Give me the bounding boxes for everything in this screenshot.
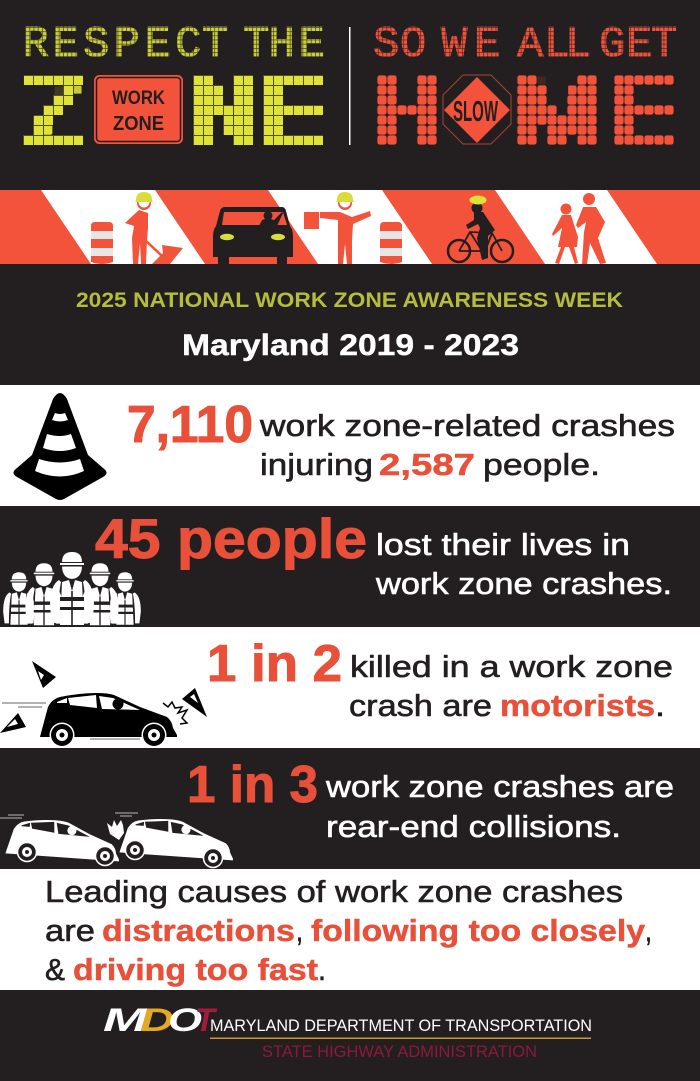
logo: mdot: D [140, 1002, 174, 1038]
heading word: home in dots: E [611, 56, 676, 166]
divider [349, 27, 350, 145]
icon: traffic cone [14, 393, 106, 500]
text: crash are motorists: motorists [500, 688, 655, 723]
icon: traffic barrel left [91, 222, 113, 264]
sign: work zone: ZONE [113, 113, 164, 135]
heading word: zone in dot matrix: Z [26, 56, 82, 166]
icon: flagger [304, 192, 371, 264]
text: crash are motorists: . [655, 688, 665, 723]
text: crashes line two: injuring [260, 447, 373, 482]
panel: leading causes [0, 869, 700, 990]
text: crash are motorists: crash are [349, 688, 492, 723]
text: crash are motorists [349, 688, 665, 723]
sign: slow [443, 75, 511, 144]
text: leading causes line two: distractions [102, 913, 295, 948]
text: crashes line two [260, 447, 600, 482]
sign: work zone: WORK [112, 87, 165, 109]
heading: so we all get home [370, 20, 680, 166]
stat: 1 in 2: 1 in 2 [207, 635, 342, 693]
stat: 7,110: 7,110 [127, 396, 253, 454]
heading word: home in dots: H [374, 56, 440, 166]
icon: car hitting cones [0, 661, 207, 748]
text: lost their lives: lost their lives in [376, 527, 630, 562]
heading: awareness week: 2025 NATIONAL WORK ZONE AWARENESS WEEK [76, 289, 623, 312]
logo: mdot: M [103, 1002, 149, 1038]
icon: two cars colliding [0, 813, 235, 868]
heading: respect the zone [20, 20, 330, 166]
text: leading causes line three: . [318, 952, 326, 987]
icon: traffic barrel right [380, 222, 402, 264]
logo: mdot: O [168, 1002, 202, 1038]
sign: work zone [94, 76, 182, 144]
heading word: home in dots: M [514, 56, 604, 166]
stat: 45 people: 45 people [95, 507, 367, 570]
icon: car front with driver [213, 207, 293, 264]
text: leading causes line two: , [296, 913, 303, 948]
text: leading causes line two: , [645, 913, 652, 948]
footer logo [103, 1002, 592, 1061]
logo: mdot: T [195, 1002, 218, 1038]
text: leading causes line two [45, 913, 652, 948]
heading word: home in dots [374, 56, 676, 166]
icon: pedestrians [552, 193, 606, 264]
hazard stripe band [0, 190, 700, 264]
text: leading causes line one: Leading causes of work zone crashes [45, 874, 623, 909]
stat: 1 in 3: 1 in 3 [187, 756, 318, 814]
heading word: zone in dot matrix [23, 56, 325, 166]
panel: motorists [0, 627, 700, 748]
text: work zone crashes: work zone crashes. [375, 566, 672, 601]
text: maryland department of transportation: MARYLAND DEPARTMENT OF TRANSPORTATION [210, 1016, 592, 1035]
icon: cyclist [448, 196, 513, 262]
text: rear-end collisions: rear-end collisions. [326, 809, 621, 844]
panel: fatalities [0, 506, 700, 627]
icon: worker with shovel [125, 192, 183, 264]
icon: group of workers [3, 552, 141, 625]
text: crashes line one: work zone-related crashes [259, 408, 675, 443]
heading word: zone in dot matrix: N [190, 56, 256, 166]
text: state highway administration: STATE HIGHWAY ADMINISTRATION [262, 1042, 537, 1061]
text: work zone crashes are: work zone crashes are [325, 769, 674, 804]
logo: mdot [103, 1002, 218, 1038]
text: leading causes line two: following too closely [311, 913, 646, 948]
sign: slow: SLOW [453, 96, 498, 128]
panel: rear-end collisions [0, 748, 700, 869]
heading line: so we all get: SO WE ALL GET [373, 20, 677, 70]
heading word: zone in dot matrix: E [260, 56, 325, 166]
heading line: respect the: RESPECT THE [22, 20, 325, 70]
text: crashes line two: 2,587 [379, 447, 475, 482]
text: killed in a work zone: killed in a work zone [350, 649, 673, 684]
panel: crashes [0, 385, 700, 506]
text: leading causes line three: driving too fast [73, 952, 318, 987]
text: leading causes line two: are [45, 913, 95, 948]
text: crashes line two: people. [483, 447, 600, 482]
text: leading causes line three: & [45, 952, 65, 987]
heading: maryland dates: Maryland 2019 - 2023 [182, 329, 519, 362]
